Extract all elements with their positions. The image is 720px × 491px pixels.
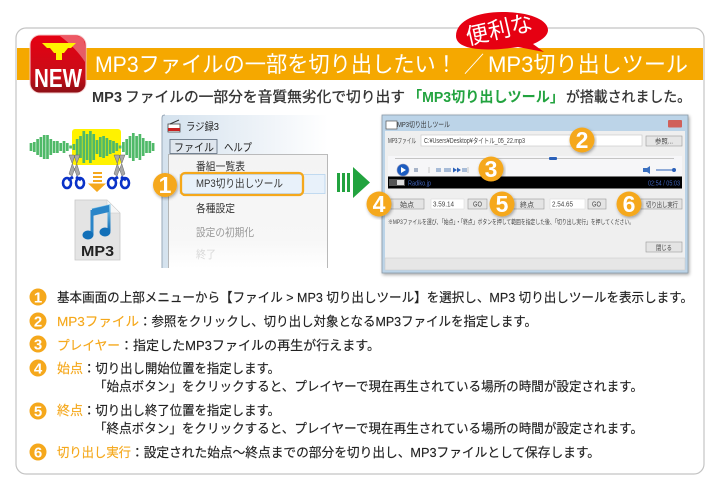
menu bar	[170, 140, 252, 154]
text block: step 2: MP3ファイル	[57, 314, 139, 329]
icon: number 6	[616, 191, 642, 217]
player	[388, 156, 682, 188]
text block: step 6	[30, 444, 600, 462]
text block: step 4: ：切り出し開始位置を指定します。	[83, 361, 280, 376]
menu bar: ヘルプ	[224, 141, 252, 154]
icon: number 6: 6	[623, 191, 635, 217]
icon: MP3 file: MP3	[81, 243, 114, 260]
text block: step 5	[30, 402, 643, 436]
icon: NEW badge: NEW	[34, 63, 82, 93]
dropdown menu: 終了	[196, 248, 216, 261]
file row: MP3ファイル	[388, 137, 416, 145]
dropdown menu: MP3切り出しツール	[196, 177, 283, 190]
text block: step 5: 終点	[57, 403, 83, 418]
range row: 終点	[520, 200, 534, 209]
text block: step 4: 4	[34, 360, 43, 378]
subtitle: MP3	[92, 90, 122, 106]
icon: number 2	[570, 127, 594, 153]
icon: app	[168, 120, 180, 132]
text block: step 5: 「終点ボタン」をクリックすると、プレイヤーで現在再生されている場所の時間が設定されます。	[94, 421, 643, 436]
text block: step 5: 5	[34, 404, 42, 420]
text block: step 3: ：指定したMP3ファイルの再生が行えます。	[120, 338, 380, 353]
text block: step 4: 始点	[57, 361, 83, 376]
text block: step 2: ：参照をクリックし、切り出し対象となるMP3ファイルを指定します。	[139, 314, 537, 329]
title band: ／	[464, 52, 484, 77]
player: Radiko.jp	[408, 180, 431, 188]
title band: MP3切り出しツール	[488, 52, 688, 77]
arrow: down	[88, 172, 106, 192]
dropdown menu: 設定の初期化	[196, 226, 254, 239]
icon: number 1	[153, 172, 177, 198]
icon: number 4	[366, 191, 392, 217]
menu bar: ファイル	[174, 142, 214, 154]
arrow: green	[337, 167, 370, 198]
icon: waveform cut	[31, 129, 153, 192]
note text: ※MP3ファイルを選び、「始点」・「終点」ボタンを押して範囲を指定した後、「切り出し実行」を押してください。	[388, 217, 634, 226]
text block: step 6: ：設定された始点～終点までの部分を切り出し、MP3ファイルとして保存します。	[131, 445, 600, 460]
text block: step 6: 6	[34, 444, 42, 462]
icon: number 5: 5	[496, 191, 509, 217]
title band	[17, 48, 703, 80]
highlight box	[181, 173, 303, 195]
title band: MP3ファイルの一部を切り出したい！	[95, 52, 457, 77]
text block: step 4: 「始点ボタン」をクリックすると、プレイヤーで現在再生されている場所の時間が設定されます。	[94, 379, 643, 394]
range row: 3.59.14	[433, 202, 454, 208]
range row: 始点	[400, 200, 414, 209]
dropdown menu: 各種設定	[196, 201, 235, 215]
file row	[388, 135, 682, 146]
icon: NEW badge	[30, 35, 86, 93]
range row: GO	[473, 202, 482, 208]
icon: number 3: 3	[485, 156, 497, 182]
range row	[390, 199, 682, 209]
subtitle	[92, 88, 691, 106]
subtitle: 「MP3切り出しツール」	[408, 89, 564, 106]
range row: 2.54.65	[552, 202, 573, 208]
icon: number 4: 4	[373, 191, 386, 217]
icon: right scissors	[108, 155, 129, 188]
range row: GO	[592, 202, 601, 208]
player: 02:54 / 05:03	[648, 180, 680, 188]
dropdown menu: 番組一覧表	[196, 160, 245, 173]
panel: MP3 tool window	[382, 115, 688, 273]
title bar	[386, 119, 682, 129]
icon: number 5	[490, 191, 514, 217]
icon: MP3 file	[75, 200, 120, 260]
icon: number 3	[478, 156, 504, 182]
dropdown menu	[168, 154, 328, 268]
callout: speech bubble: 便利な	[463, 9, 535, 50]
window title: ラジ録3	[186, 120, 219, 133]
text block: step 1: 1	[34, 290, 42, 306]
text block: step 6: 切り出し実行	[57, 445, 131, 460]
subtitle: が搭載されました。	[566, 88, 691, 106]
text block: step 5: ：切り出し終了位置を指定します。	[83, 403, 280, 418]
close button	[646, 242, 682, 252]
icon: number 2: 2	[576, 127, 588, 153]
icon: left scissors	[63, 155, 84, 188]
file row: 参照...	[655, 136, 673, 146]
text block: step 2: 2	[34, 314, 42, 330]
file row: C:¥Users¥Desktop¥タイトル_05_22.mp3	[424, 136, 525, 145]
text block: step 3: プレイヤー	[57, 338, 120, 353]
text block: step 3: 3	[34, 336, 42, 354]
text block: step 1: 基本画面の上部メニューから【ファイル > MP3 切り出しツール】を選択し、MP3 切り出しツールを表示します。	[57, 290, 693, 305]
text block: step 2	[30, 312, 537, 330]
icon: number 1: 1	[159, 172, 172, 198]
title bar: MP3切り出しツール	[397, 119, 450, 129]
text block: step 3	[30, 336, 380, 354]
range row: 切り出し実行	[646, 200, 678, 209]
panel: main window screenshot	[162, 115, 328, 268]
subtitle: ファイルの一部分を音質無劣化で切り出す	[125, 88, 405, 106]
close button: 閉じる	[656, 244, 672, 252]
text block: step 4	[30, 360, 643, 394]
